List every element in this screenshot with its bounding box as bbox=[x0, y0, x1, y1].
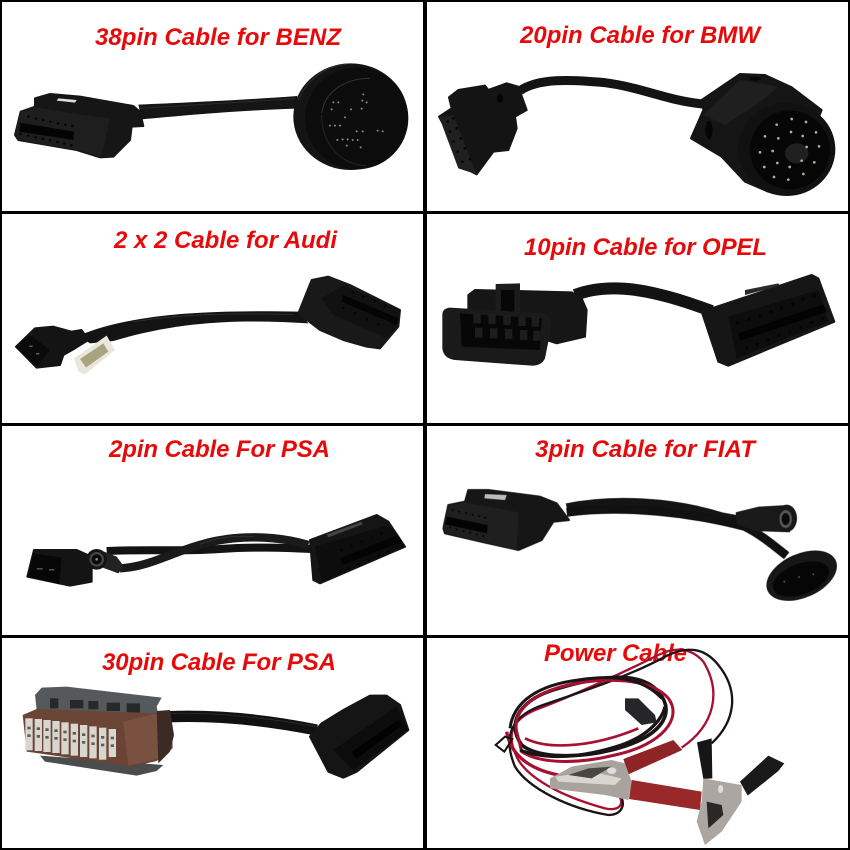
heading: 2 x 2: 2 x 2 Cable for Audi bbox=[113, 227, 338, 254]
panel: 2 x 2 Cable for Audi bbox=[2, 214, 423, 423]
cable illustration: BMW bbox=[439, 74, 835, 196]
heading: Power Cable: Power Cable bbox=[544, 640, 687, 667]
panel: Power Cable bbox=[427, 638, 848, 848]
heading: 3pin: 3pin Cable for FIAT bbox=[535, 436, 757, 463]
panel: 2pin Cable For PSA bbox=[2, 426, 423, 635]
panel: 20pin Cable for BMW bbox=[427, 2, 848, 211]
panel: 3pin Cable for FIAT bbox=[427, 426, 848, 635]
cable illustration: PSA 2pin bbox=[27, 515, 405, 586]
cable illustration: PSA 30pin bbox=[23, 687, 408, 778]
heading: 20pin: 20pin Cable for BMW bbox=[519, 22, 762, 49]
cable illustration: FIAT bbox=[443, 490, 845, 611]
heading: 10pin: 10pin Cable for OPEL bbox=[524, 234, 767, 261]
cable illustration: Audi bbox=[16, 277, 400, 374]
panel: 30pin Cable For PSA bbox=[2, 638, 423, 848]
panel: 10pin Cable for OPEL bbox=[427, 214, 848, 423]
heading: 2pin: 2pin Cable For PSA bbox=[108, 436, 330, 463]
cable illustration: power cable with clips bbox=[496, 650, 784, 845]
cable illustration: OPEL bbox=[442, 275, 834, 366]
panel: 38pin Cable for BENZ bbox=[2, 2, 423, 211]
heading: 30pin: 30pin Cable For PSA bbox=[102, 649, 336, 676]
cable illustration: BENZ bbox=[15, 63, 408, 170]
heading: 38pin: 38pin Cable for BENZ bbox=[95, 24, 342, 51]
